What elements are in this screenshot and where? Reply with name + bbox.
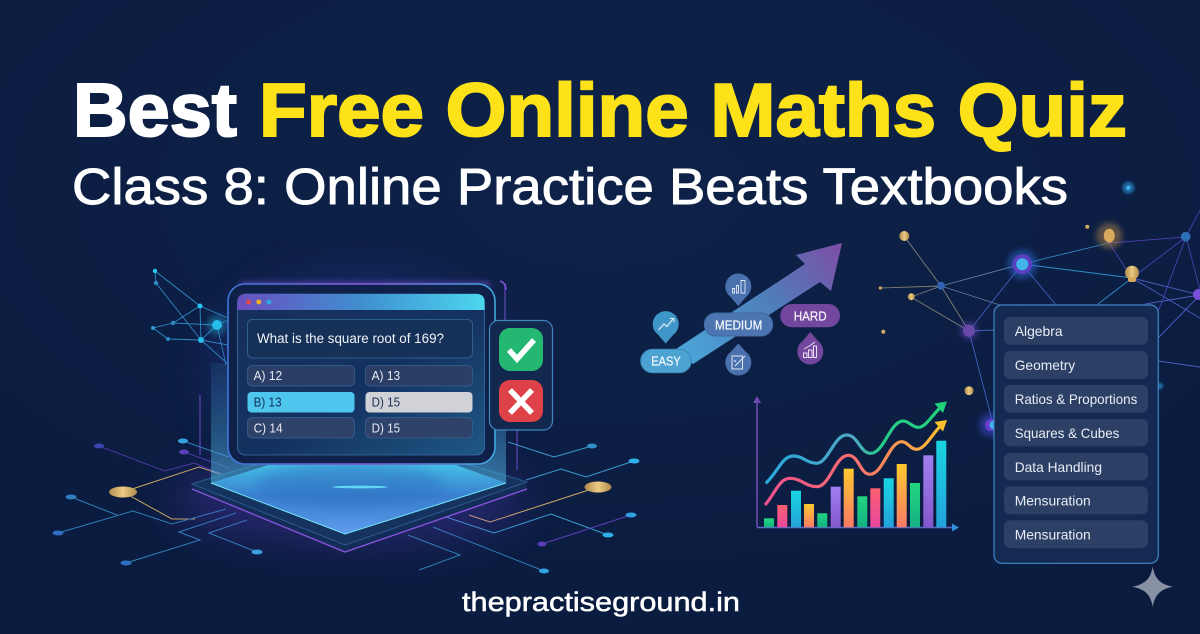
- topic: Ratios and Proportions: Ratios & Proportions: [1015, 391, 1137, 407]
- option C 14: C) 14: [254, 420, 283, 436]
- topic: Mensuration repeated: [1004, 520, 1148, 548]
- circuit lines: [58, 441, 634, 571]
- icon: bar pin: [725, 274, 751, 306]
- option A 13: A) 13: [372, 368, 400, 383]
- answer options: [248, 366, 472, 438]
- option D 15 highlighted: D) 15: [372, 394, 400, 410]
- icon: growth pin: [653, 311, 679, 344]
- topic: Mensuration repeated: Mensuration: [1015, 526, 1091, 542]
- topic: Data Handling: [1004, 453, 1148, 480]
- option D 15: D) 15: [372, 420, 400, 436]
- circuit nodes: [52, 438, 640, 574]
- question box: What is the square root of 169?: [257, 331, 444, 346]
- subtitle: Class 8: Online Practice Beats Textbooks: [72, 158, 1068, 215]
- pill: medium: MEDIUM: [715, 318, 762, 332]
- network nodes: [879, 182, 1200, 437]
- pill: easy: [641, 349, 691, 373]
- panel background: [994, 305, 1158, 563]
- title phrase: Free Online Maths Quiz: Free Online Maths Quiz: [259, 68, 1127, 152]
- panel: topics: [994, 305, 1158, 563]
- topic: Algebra: [1004, 317, 1148, 345]
- topic: Algebra: Algebra: [1015, 323, 1063, 339]
- icon: rising bars pin: [797, 332, 823, 364]
- pill: hard: [780, 304, 840, 327]
- topic: Geometry: [1004, 351, 1148, 379]
- window dots: [246, 300, 271, 304]
- pill: hard: HARD: [794, 310, 827, 324]
- option A 12: [248, 366, 354, 386]
- icon: red cross: [499, 380, 543, 422]
- trend line: pink to yellow: [765, 420, 947, 505]
- pill: medium: [704, 313, 773, 336]
- option B 13 selected: B) 13: [254, 394, 282, 410]
- topic: Ratios and Proportions: [1004, 385, 1148, 413]
- platform top: [211, 463, 506, 534]
- chart axes: [753, 396, 959, 532]
- title: [73, 68, 1127, 152]
- glow behind laptop: [175, 270, 525, 540]
- option A 13: [366, 366, 472, 386]
- screen: [228, 284, 495, 464]
- arrow: rising difficulty: [676, 243, 842, 364]
- browser title bar: [238, 294, 484, 310]
- icon: green check: [499, 328, 543, 371]
- screen bezel: [228, 284, 495, 464]
- topic: Geometry: Geometry: [1015, 357, 1075, 373]
- option C 14: [248, 418, 354, 438]
- option A 12: A) 12: [254, 368, 282, 383]
- option B 13 selected: [248, 392, 354, 412]
- trend line: blue to green: [766, 402, 947, 483]
- network links: [880, 210, 1200, 420]
- topic: Mensuration: [1004, 486, 1148, 514]
- chart bars: [764, 441, 946, 527]
- icon: sparkle: [1132, 566, 1173, 607]
- platform slab: [192, 460, 527, 552]
- screen window: [238, 294, 484, 455]
- title word: Best: Best: [73, 68, 237, 152]
- glass back panel: [200, 281, 517, 483]
- left node network: [151, 269, 228, 365]
- icon: checklist pin: [725, 344, 751, 375]
- pill: easy: EASY: [651, 354, 681, 368]
- illustration: quiz laptop: [52, 269, 640, 574]
- answer feedback card: [490, 320, 552, 430]
- question box: [248, 320, 472, 358]
- topic: Data Handling: Data Handling: [1015, 459, 1102, 475]
- topic: Squares and Cubes: [1004, 419, 1148, 446]
- top right node network: [879, 182, 1200, 437]
- option D 15 highlighted: [366, 392, 472, 412]
- chart: [753, 396, 959, 532]
- topic: Mensuration: Mensuration: [1015, 492, 1091, 508]
- option D 15: [366, 418, 472, 438]
- topic: Squares and Cubes: Squares & Cubes: [1015, 425, 1119, 441]
- footer url: thepractiseground.in: [462, 587, 740, 617]
- difficulty progression: [641, 243, 842, 375]
